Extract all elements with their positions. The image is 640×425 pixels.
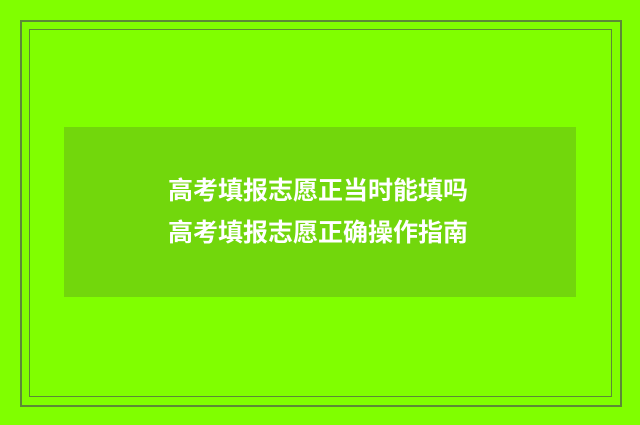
title line 1: 高考填报志愿正当时能填吗 [168, 177, 468, 205]
panel: title band [64, 127, 576, 297]
title line 2: 高考填报志愿正确操作指南 [168, 219, 468, 247]
inner frame [29, 29, 612, 397]
